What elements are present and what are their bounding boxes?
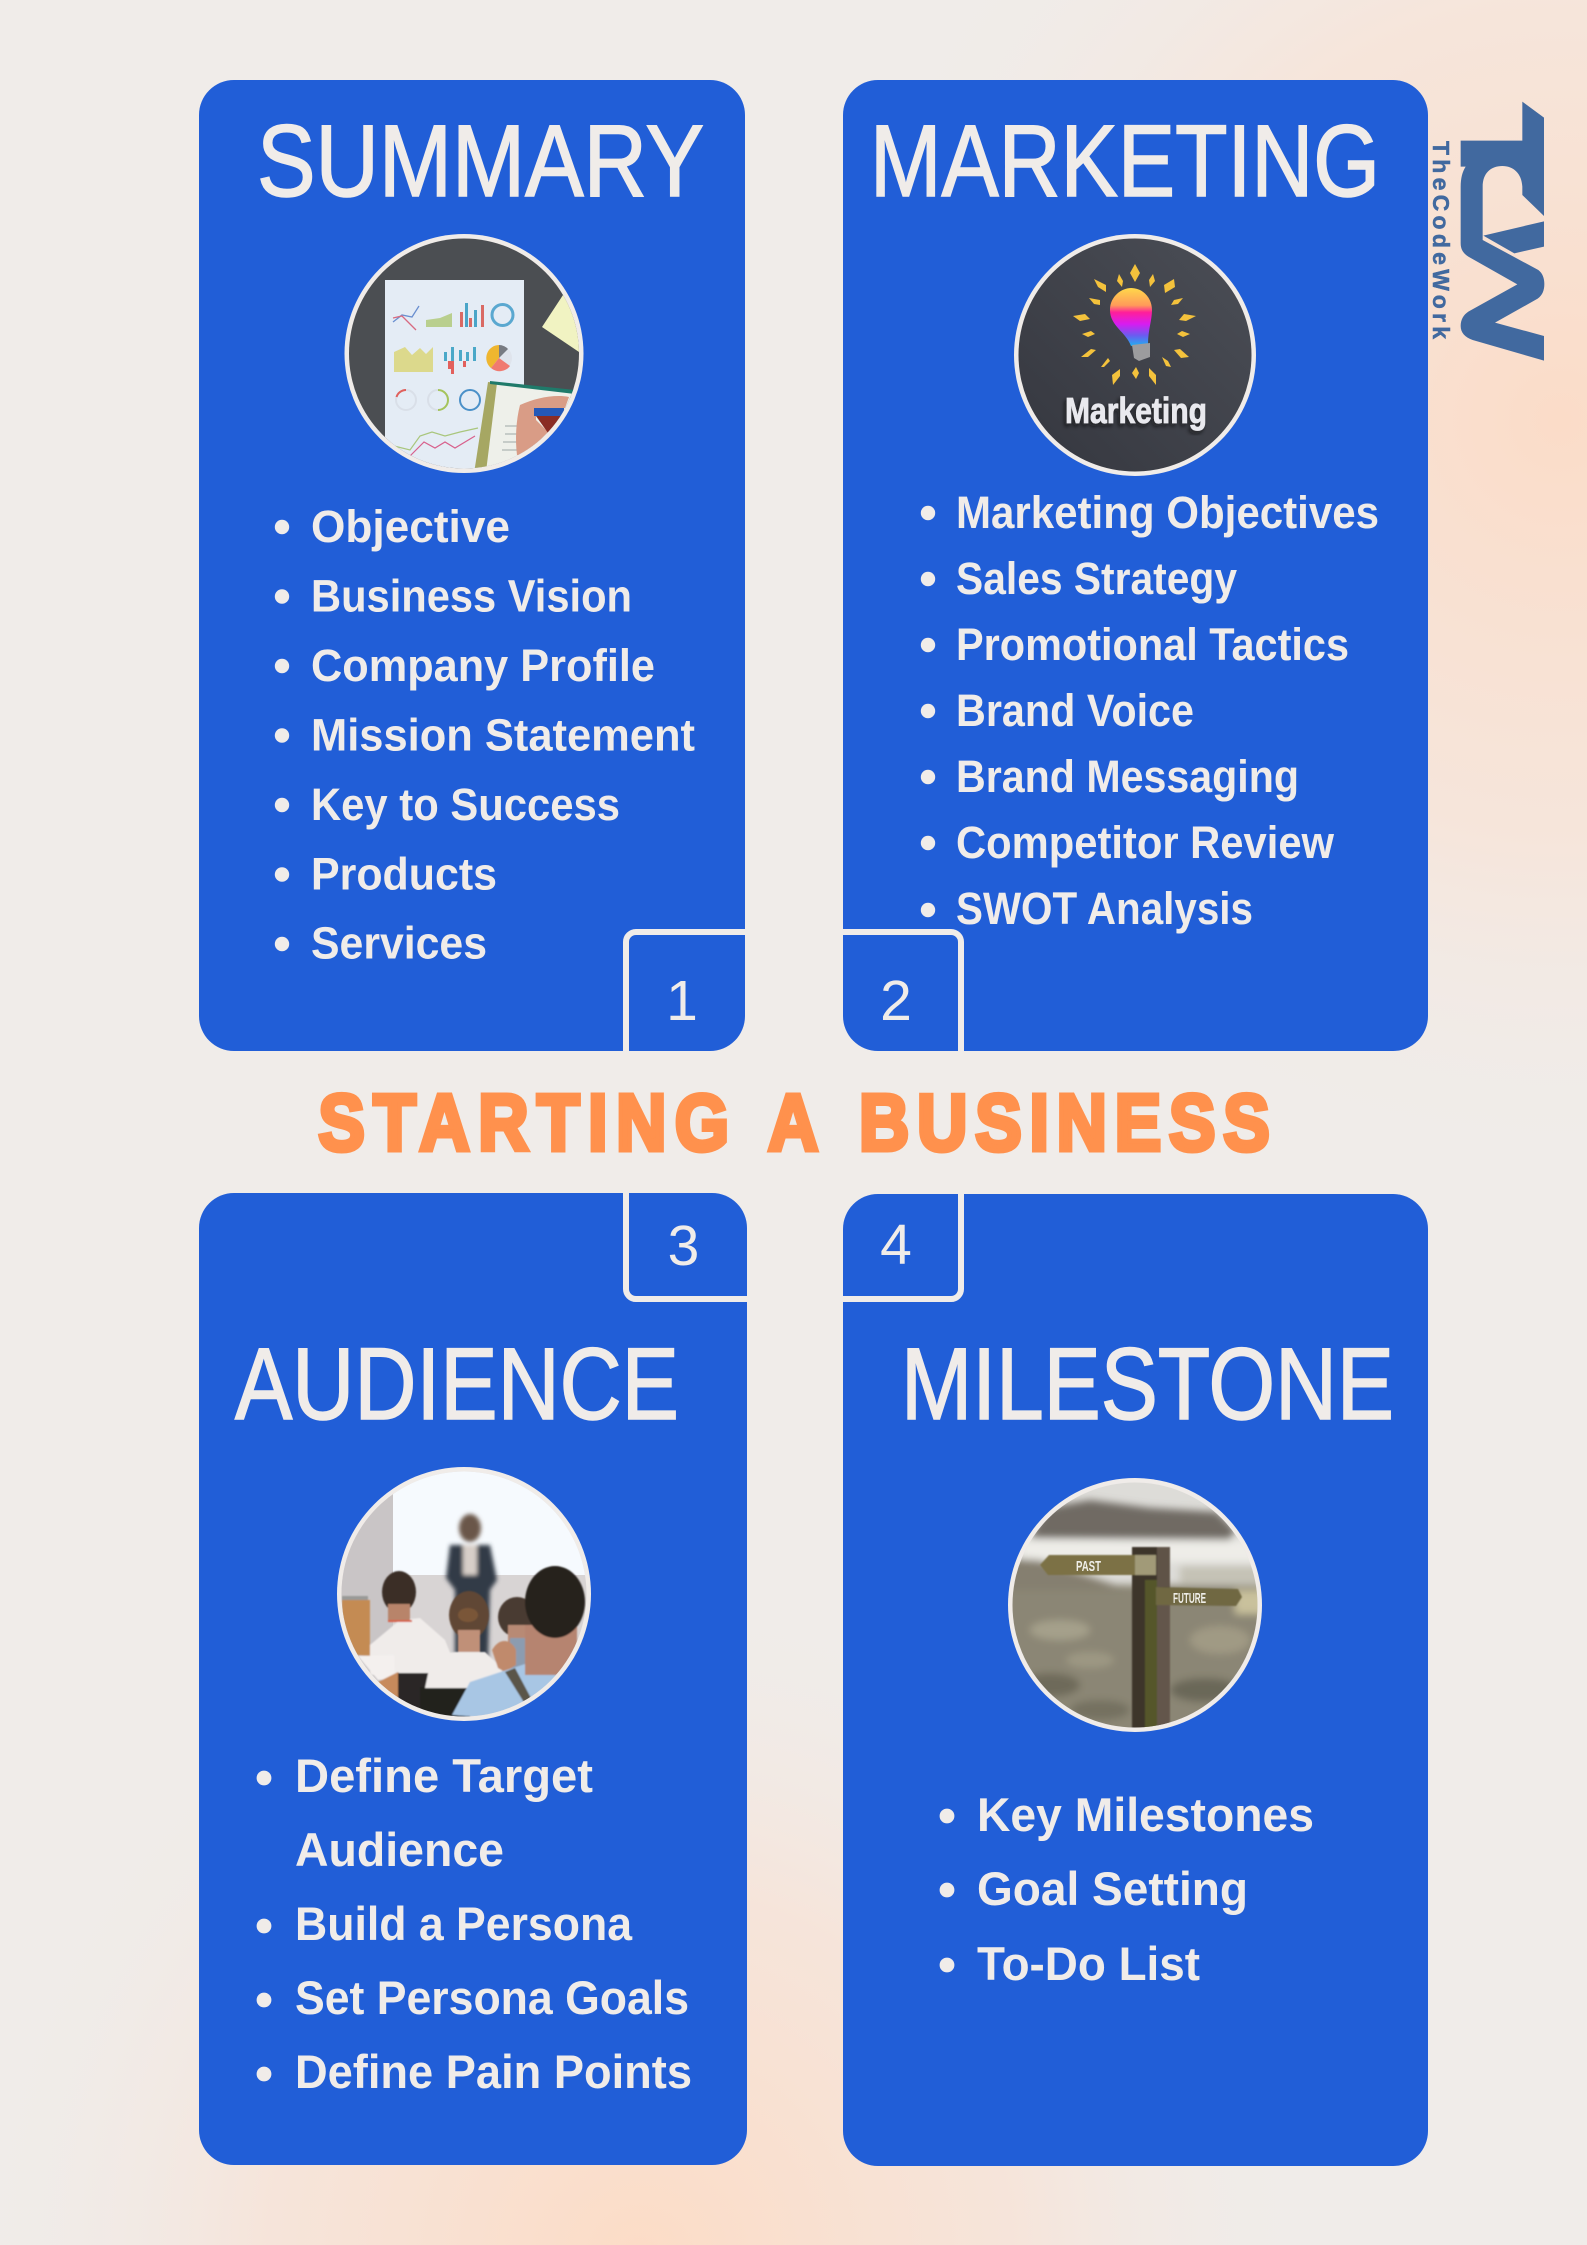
title: BUSINESS bbox=[859, 1077, 1270, 1167]
list: summary items bbox=[275, 501, 695, 968]
title: STARTING bbox=[318, 1077, 729, 1167]
heading: summary: SUMMARY bbox=[257, 104, 704, 218]
number tab 4 bbox=[843, 1194, 961, 1299]
list: summary items: Business Vision bbox=[311, 570, 632, 622]
list: audience items: Define Target bbox=[295, 1749, 593, 1802]
list: summary items: Key to Success bbox=[311, 779, 620, 830]
list: milestone items bbox=[940, 1788, 1314, 1990]
photo: past and future signpost bbox=[1005, 1475, 1270, 1745]
heading: marketing: MARKETING bbox=[870, 104, 1380, 218]
list: marketing items: Brand Messaging bbox=[956, 751, 1299, 802]
list: milestone items: Goal Setting bbox=[977, 1862, 1248, 1915]
photo: past and future signpost: PAST bbox=[1076, 1558, 1101, 1575]
logo wordmark: TheCodeWork bbox=[1428, 141, 1454, 339]
list: audience items: Define Pain Points bbox=[295, 2045, 692, 2098]
list: audience items bbox=[257, 1749, 692, 2098]
list: milestone items: To-Do List bbox=[977, 1937, 1200, 1990]
list: marketing items bbox=[921, 487, 1379, 934]
list: audience items: Audience bbox=[295, 1823, 504, 1876]
number tab 2 bbox=[843, 932, 961, 1051]
panel: marketing bbox=[843, 80, 1428, 1051]
heading: audience: AUDIENCE bbox=[235, 1327, 679, 1441]
photo: seminar audience bbox=[335, 1465, 595, 1737]
number tab 3: 3 bbox=[668, 1214, 699, 1278]
number tab 3 bbox=[626, 1193, 747, 1299]
number tab 4: 4 bbox=[880, 1213, 912, 1277]
photo: charts on paper bbox=[340, 230, 590, 480]
photo: past and future signpost: FUTURE bbox=[1173, 1590, 1206, 1607]
panel: milestone bbox=[843, 1194, 1428, 2166]
panel: audience bbox=[199, 1193, 747, 2165]
number tab 1 bbox=[626, 932, 745, 1051]
list: marketing items: Brand Voice bbox=[956, 685, 1194, 736]
list: marketing items: Competitor Review bbox=[956, 817, 1335, 868]
list: marketing items: SWOT Analysis bbox=[956, 883, 1253, 934]
list: marketing items: Marketing Objectives bbox=[956, 487, 1379, 538]
list: marketing items: Sales Strategy bbox=[956, 553, 1237, 604]
list: summary items: Mission Statement bbox=[311, 710, 695, 760]
list: summary items: Objective bbox=[311, 501, 510, 552]
list: summary items: Services bbox=[311, 918, 487, 968]
number tab 1: 1 bbox=[666, 969, 698, 1033]
list: audience items: Set Persona Goals bbox=[295, 1971, 689, 2024]
list: summary items: Products bbox=[311, 848, 497, 900]
number tab 2: 2 bbox=[880, 969, 912, 1033]
title: A bbox=[768, 1077, 818, 1167]
list: audience items: Build a Persona bbox=[295, 1897, 633, 1950]
list: marketing items: Promotional Tactics bbox=[956, 619, 1349, 670]
photo: marketing lightbulb bbox=[1010, 230, 1260, 480]
photo: marketing lightbulb: Marketing bbox=[1065, 390, 1207, 431]
title bbox=[318, 1077, 1270, 1167]
panel: summary bbox=[199, 80, 745, 1051]
list: milestone items: Key Milestones bbox=[977, 1788, 1314, 1841]
logo mark bbox=[1461, 102, 1544, 361]
heading: milestone: MILESTONE bbox=[901, 1327, 1394, 1441]
list: summary items: Company Profile bbox=[311, 640, 655, 691]
logo: TheCodeWork bbox=[1428, 102, 1544, 361]
